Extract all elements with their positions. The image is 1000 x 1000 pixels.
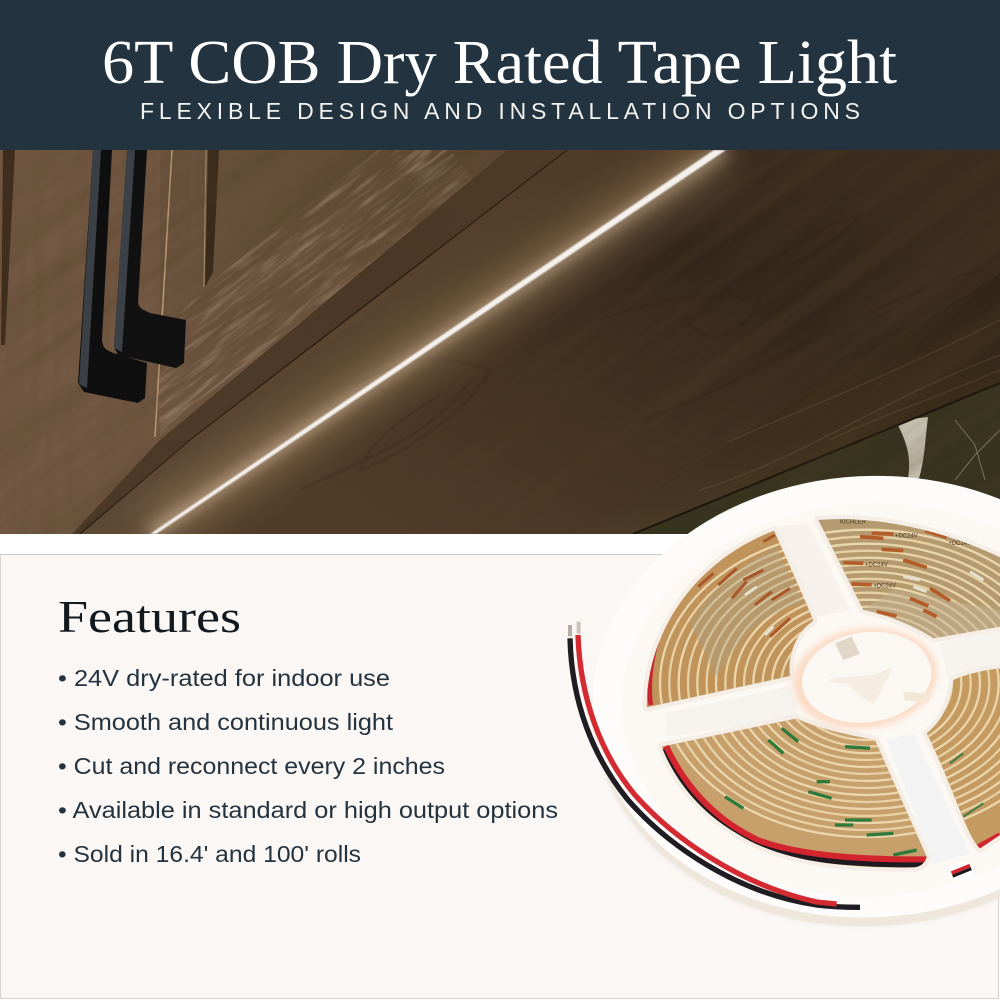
title: 6T COB Dry Rated Tape Light	[102, 29, 897, 97]
hub peach glow	[786, 619, 944, 738]
cabinet handle front	[114, 150, 186, 368]
marble vein	[898, 417, 928, 482]
light gap between doors	[155, 150, 172, 437]
thin marble veins	[955, 420, 1000, 480]
printed tape labels: +DC24V	[948, 541, 971, 547]
drop shadow	[596, 740, 1000, 926]
heading: Features: Features	[58, 591, 241, 642]
bullet 1: • 24V dry-rated for indoor use	[58, 665, 390, 691]
underside of cabinet left of strip	[80, 150, 725, 534]
feature panel background	[0, 554, 998, 998]
hub inner disc	[796, 624, 937, 731]
silver glints	[903, 572, 983, 592]
recessed door panel	[205, 150, 377, 287]
diagonal wood grain	[0, 152, 1000, 532]
spool lower thickness	[596, 734, 1000, 926]
spoke tint bottom-right	[887, 733, 970, 863]
printed tape labels: +DC24V	[895, 533, 918, 539]
bullet 5: • Sold in 16.4' and 100' rolls	[58, 841, 361, 867]
groove highlight	[204, 150, 206, 287]
wire through slot	[951, 864, 972, 878]
tape light spool	[568, 462, 1000, 940]
window: lower left coils	[657, 530, 1000, 873]
wire slot	[947, 860, 976, 884]
grey-green reflection	[690, 547, 803, 677]
wire in right window	[978, 835, 1000, 847]
crack line	[80, 150, 567, 534]
spoke tint right	[940, 630, 1000, 677]
subtitle: FLEXIBLE DESIGN AND INSTALLATION OPTIONS	[140, 98, 860, 124]
door frame stile	[160, 150, 208, 350]
glow around strip	[150, 150, 725, 534]
printed tape labels: +DC24V	[865, 563, 888, 569]
window: right coils	[660, 530, 1000, 853]
spoke tint left	[665, 687, 798, 737]
wire tip red	[577, 622, 581, 634]
window: upper left coils	[646, 530, 814, 708]
printed tape labels: +DC24V	[873, 583, 896, 589]
groove in door panel	[205, 150, 219, 287]
cathedral grain figures	[302, 376, 373, 490]
feature list	[58, 665, 558, 867]
front lip of cabinet	[580, 273, 1000, 534]
rail wood flecks	[157, 150, 472, 434]
bullet 2: • Smooth and continuous light	[58, 709, 394, 735]
bullet 3: • Cut and reconnect every 2 inches	[58, 753, 445, 779]
bullet 4: • Available in standard or high output options	[58, 797, 558, 823]
door bevel dark band	[160, 150, 567, 440]
spool outer disc	[581, 462, 1000, 932]
door wood face	[0, 150, 1000, 534]
hub tab right	[903, 692, 932, 703]
spoke tint top-left	[777, 523, 850, 617]
black wire inside window	[665, 748, 927, 863]
door bottom rail	[248, 150, 506, 318]
hub centre clip	[828, 667, 892, 703]
window: upper right coils	[660, 510, 1000, 837]
underside of door end	[72, 440, 190, 534]
outer black wire	[570, 638, 860, 907]
orange dashes	[698, 535, 790, 637]
cabinet handle rear	[78, 150, 147, 403]
red wire at window edge	[648, 640, 660, 706]
wire tip black	[568, 625, 572, 636]
inner rim band	[612, 491, 1000, 909]
groove in door frame left	[1, 150, 15, 345]
red wire inside window	[666, 746, 927, 859]
photo: under-cabinet lighting	[0, 150, 1000, 534]
green print right	[950, 753, 983, 817]
light strata on front lip	[700, 320, 1000, 490]
silver glints	[745, 587, 773, 635]
header band	[0, 0, 1000, 150]
window surrounds	[647, 519, 1000, 867]
printed tape labels: KICHLER	[840, 519, 867, 525]
outer red wire	[578, 635, 837, 904]
hub tab top	[835, 637, 860, 660]
printed tape labels	[840, 519, 971, 589]
inner glow	[150, 150, 725, 534]
vertical wood grain	[0, 150, 380, 534]
underside of cabinet right of strip	[150, 150, 1000, 534]
LED tape line	[150, 150, 726, 534]
cabinet bottom edge	[633, 383, 1000, 534]
orange dashes	[843, 531, 950, 617]
panel top rule	[0, 554, 660, 555]
green adhesive print	[725, 728, 917, 855]
white gap line	[0, 534, 1000, 554]
marble backsplash	[633, 383, 1000, 534]
